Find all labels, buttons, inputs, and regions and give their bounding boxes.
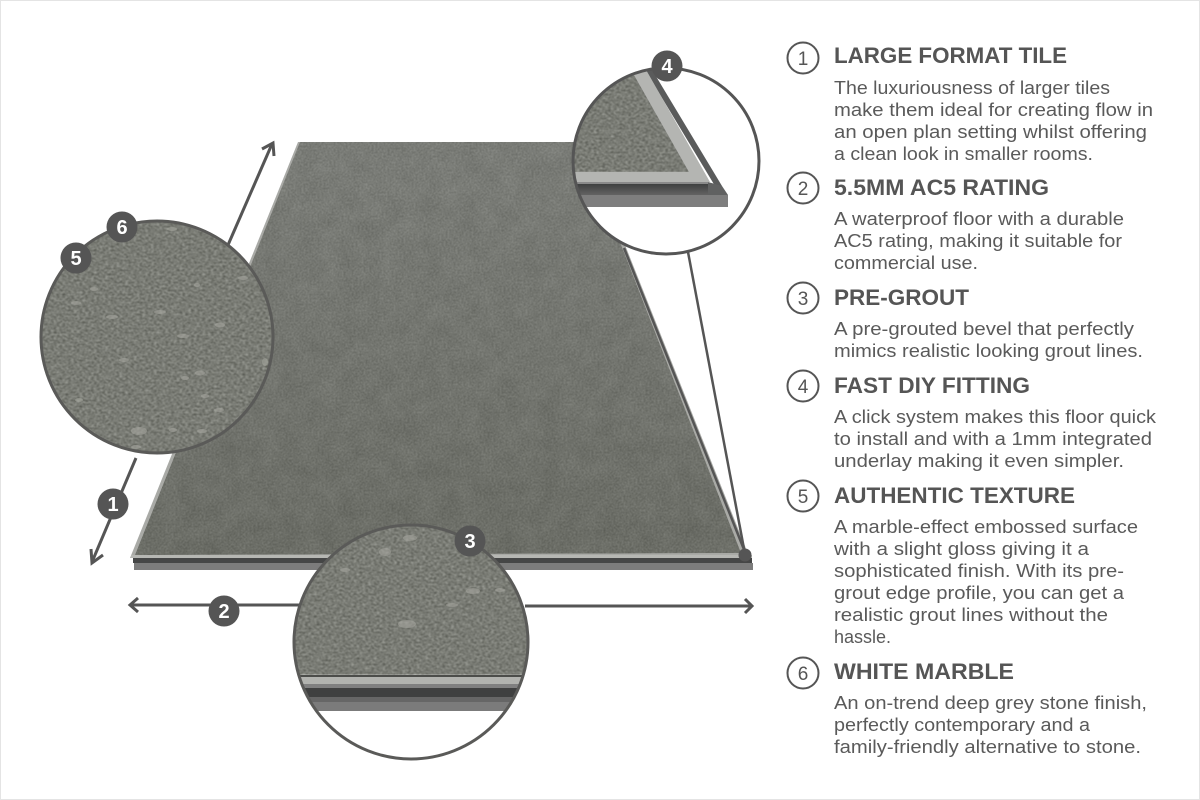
feature 5: authentic texture: 5 <box>798 487 808 508</box>
feature 6: white marble: WHITE MARBLE <box>834 659 1014 684</box>
magnifier: surface texture <box>41 221 273 453</box>
feature 5: authentic texture: A marble-effect embossed surface <box>834 517 1138 537</box>
tile side edges <box>130 142 749 558</box>
feature 5: authentic texture: sophisticated finish. With its pre- <box>834 561 1124 581</box>
marble flecks <box>71 227 268 449</box>
magnifier: pre-grout edge <box>290 520 532 759</box>
feature 1: large format tile <box>788 42 1153 164</box>
badge 1 <box>98 488 128 520</box>
floor tile illustration <box>130 142 753 570</box>
feature 5: authentic texture: with a slight gloss giving it a <box>833 539 1090 559</box>
feature 1: large format tile: 1 <box>798 49 808 70</box>
feature 3: pre-grout: mimics realistic looking grout lines. <box>834 341 1143 361</box>
light bevel <box>575 72 710 182</box>
badge 2 <box>208 596 240 626</box>
arrow: tile length <box>91 143 274 563</box>
feature 2: 5.5mm AC5 rating: commercial use. <box>834 253 978 273</box>
badge 6 <box>106 212 138 242</box>
feature 6: white marble: perfectly contemporary and a <box>834 715 1091 735</box>
feature 1: large format tile: make them ideal for creating flow in <box>834 100 1153 120</box>
feature 2: 5.5mm AC5 rating <box>788 172 1124 273</box>
feature 2: 5.5mm AC5 rating: 5.5MM AC5 RATING <box>834 175 1049 200</box>
feature 5: authentic texture <box>788 480 1138 647</box>
feature 3: pre-grout <box>788 282 1143 361</box>
feature 6: white marble: An on-trend deep grey stone finish, <box>834 693 1147 713</box>
badge 1: 1 <box>107 494 119 516</box>
feature 3: pre-grout: A pre-grouted bevel that perfectly <box>834 319 1134 339</box>
feature 5: authentic texture: hassle. <box>834 627 891 647</box>
badge 3 <box>454 526 486 556</box>
feature 1: large format tile: The luxuriousness of larger tiles <box>834 78 1110 98</box>
badge 6: 6 <box>116 217 128 239</box>
feature 5: authentic texture: AUTHENTIC TEXTURE <box>834 483 1075 508</box>
feature 4: fast DIY fitting: underlay making it even simpler. <box>834 451 1124 471</box>
badge 3: 3 <box>464 531 476 553</box>
dark side of click profile <box>644 68 722 186</box>
grout bevel layers <box>290 675 532 711</box>
feature 4: fast DIY fitting: to install and with a 1mm integrated <box>834 429 1152 449</box>
magnifier: click system corner <box>560 68 759 254</box>
feature 1: large format tile: LARGE FORMAT TILE <box>834 43 1067 68</box>
stone surface <box>574 75 689 172</box>
arrow: tile width <box>130 598 752 613</box>
badge 4: 4 <box>661 56 673 78</box>
badge 5: 5 <box>70 248 82 270</box>
feature 6: white marble: 6 <box>798 664 808 685</box>
feature 2: 5.5mm AC5 rating: 2 <box>798 179 808 200</box>
tile surface <box>135 142 741 555</box>
badge 5 <box>60 242 92 274</box>
feature 4: fast DIY fitting: 4 <box>798 377 809 398</box>
stone surface <box>290 520 532 675</box>
feature 4: fast DIY fitting: A click system makes this floor quick <box>834 407 1157 427</box>
feature 2: 5.5mm AC5 rating: A waterproof floor with a durable <box>834 209 1124 229</box>
front profile <box>577 182 728 207</box>
feature 4: fast DIY fitting: FAST DIY FITTING <box>834 373 1030 398</box>
badge 2: 2 <box>218 601 230 623</box>
feature 2: 5.5mm AC5 rating: AC5 rating, making it suitable for <box>834 231 1122 251</box>
feature 4: fast DIY fitting <box>788 370 1157 471</box>
callout lines to detail 4 <box>624 248 752 562</box>
feature 3: pre-grout: 3 <box>798 289 808 310</box>
feature 1: large format tile: a clean look in smaller rooms. <box>834 144 1093 164</box>
marble flecks <box>340 535 505 628</box>
feature 6: white marble: family-friendly alternative to stone. <box>834 737 1141 757</box>
feature 6: white marble <box>788 658 1147 757</box>
badge 4 <box>652 50 682 82</box>
tile front profile <box>131 555 753 570</box>
feature 1: large format tile: an open plan setting whilst offering <box>834 122 1147 142</box>
feature 5: authentic texture: realistic grout lines without the <box>834 605 1108 625</box>
feature 3: pre-grout: PRE-GROUT <box>834 285 970 310</box>
feature 5: authentic texture: grout edge profile, you can get a <box>834 583 1125 603</box>
